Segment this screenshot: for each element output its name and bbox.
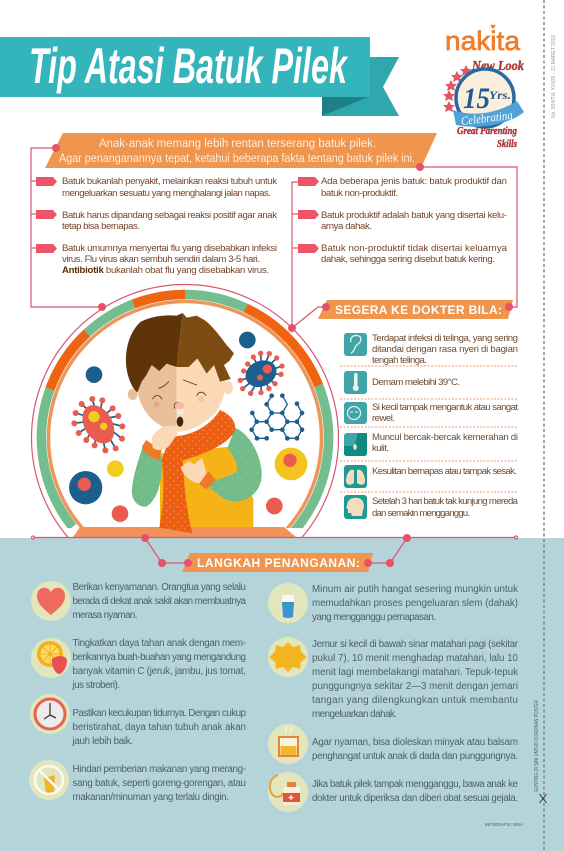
right sleeve [208,428,262,502]
step 2 text [72,638,246,691]
hands [152,426,178,450]
facts list: right column: batuk non-produktif. [321,188,398,199]
lower connector lines [32,536,518,563]
facts list: right column [298,176,508,265]
icon: red virus [71,396,125,453]
issue number vertical text: No. 834/TH. XVI/25 - 31 MARET 2015 [551,35,557,118]
boy [126,313,262,533]
step 3 text: beristirahat, daya tahan tubuh anak akan [72,722,246,733]
scarf [159,410,235,533]
step 4 text [72,764,246,803]
facts list: right column: Ada beberapa jenis batuk: batuk produktif dan [321,176,507,187]
connector lines [31,148,517,328]
icon: lungs [344,465,367,488]
credit: INFOGRAFIS: NINA [485,822,524,828]
step 1 text: merasa nyaman. [72,610,138,621]
step 1 text [72,582,247,621]
step 4 text: makanan/minuman yang terlalu dingin. [72,792,229,803]
symptom texts: kulit. [372,443,389,454]
15 years badge [443,59,524,150]
icon: plain dots [69,332,307,522]
icon: balm jar [268,724,308,764]
facial features [153,380,206,408]
step 7 text: Agar nyaman, bisa dioleskan minyak atau balsam [312,737,518,748]
left sleeve [132,445,162,507]
step 7 text [312,737,518,762]
symptom texts: rewel. [372,413,395,424]
illustration: germs and coughing boy [69,313,307,533]
15 years badge: Yrs. [489,88,511,102]
step 6 text: punggungnya sekitar 2—3 menit dengan jemari [312,681,518,692]
15 years badge: 15 [463,82,490,115]
bottom teal background [0,538,564,851]
15 years badge: Skills [497,139,517,150]
facts list: right column: dahak, sehingga sering disebut batuk kering. [321,254,495,265]
steps: left column [29,581,247,803]
step 6 text: mengeluarkan dahak. [312,709,397,720]
face [137,352,177,432]
step 5 text: Minum air putih hangat sesering mungkin untuk [312,584,518,595]
symptom texts: Si kecil tampak mengantuk atau sangat [372,402,518,413]
facts list: left column: mengeluarkan sesuatu yang menghalangi jalan napas. [62,188,271,199]
facts list: left column: Batuk umumnya menyertai flu yang disebabkan infeksi [62,243,277,254]
step 8 text: dokter untuk diperiksa dan diberi obat sesuai gejala. [312,793,518,804]
step 6 text: tangan yang dilengkungkan untuk membantu [312,695,518,706]
step 6 text: pukul 7), 10 menit menghadap matahari, lalu 10 [312,653,519,664]
symptom texts: ditandai dengan rasa nyeri di bagian [372,344,518,355]
icon: ear [344,333,367,356]
icon: medicine and stethoscope [268,772,308,812]
heading: langkah penanganan [182,553,373,572]
step 8 text [312,779,519,804]
facts list: left column [36,176,277,276]
symptom texts: Terdapat infeksi di telinga, yang sering [372,333,518,344]
step 2 text: berikannya buah-buahan yang mengandung [72,652,246,663]
step 3 text: Pastikan kecukupan tidurnya. Dengan cukup [72,708,247,719]
symptom texts: Kesulitan bernapas atau tampak sesak. [372,466,517,477]
icon: sun [268,637,308,677]
icon: clock [30,694,70,734]
icon: heart [31,581,71,621]
shirt [160,447,253,527]
step 3 text: jauh lebih baik. [72,736,133,747]
symptom texts: tengah telinga. [372,355,427,366]
heading: langkah penanganan: LANGKAH PENANGANAN: [197,556,360,570]
intro banner: Agar penanganannya tepat, ketahui beberapa fakta tentang batuk pilek ini. [59,151,415,165]
step 5 text [312,584,518,623]
icon: thermometer [344,371,367,394]
step 5 text: memudahkan proses pengeluaran slem (dahak) [312,598,518,609]
step 7 text: penghangat untuk anak di dada dan punggungnya. [312,751,518,762]
facts list: right column: arnya dahak. [321,221,372,232]
title: Tip Atasi Batuk Pilek [29,38,348,94]
icon: blue virus [238,351,285,396]
icon: citrus and strawberry [31,638,71,678]
step 5 text: yang mengganggu pernapasan. [312,612,436,623]
heading: segera ke dokter: SEGERA KE DOKTER BILA: [335,303,502,317]
symptom texts: Demam melebihi 39°C. [372,377,460,388]
step 6 text: Jemur si kecil di bawah sinar matahari pagi (sekitar [312,639,519,650]
steps: right column [268,583,519,812]
symptom texts: dan semakin mengganggu. [372,508,470,519]
facts list: right column: Batuk produktif adalah batuk yang disertai kelu- [321,210,507,221]
title ribbon [0,37,399,116]
symptom texts [372,333,519,519]
icon: skin rash [344,433,367,456]
symptom separators [340,366,518,492]
heading: segera ke dokter [318,300,513,319]
circular illustration frame [30,284,340,537]
intro banner: Anak-anak memang lebih rentan terserang batuk pilek. [99,136,376,150]
15 years badge: Celebrating [460,108,513,128]
symptom texts: Muncul bercak-bercak kemerahan di [372,432,518,443]
15 years badge: New Look [471,59,524,74]
facts list: left column: virus. Flu virus akan sembuh sendiri dalam 3-5 hari. [62,254,260,265]
15 years badge: Great Parenting [457,126,517,137]
step 8 text: Jika batuk pilek tampak mengganggu, bawa anak ke [312,779,519,790]
cut here note: GUNTING DI SINI UNTUK DIJADIKAN POSTER [534,700,540,792]
hair [126,313,183,392]
icon: molecule [250,394,304,440]
panel: see a doctor [318,300,519,519]
step 2 text: Tingkatkan daya tahan anak dengan mem- [72,638,246,649]
step 1 text: berada di dekat anak sakit akan membuatnya [72,596,247,607]
symptom texts: Setelah 3 hari batuk tak kunjung mereda [372,496,519,507]
step 6 text [312,639,519,720]
step 1 text: Berikan kenyamanan. Orangtua yang selalu [72,582,246,593]
step 2 text: banyak vitamin C (jeruk, jambu, jus tomat, [72,666,246,677]
facts list: left column: tetap bisa bernapas. [62,221,140,232]
ears [128,389,138,400]
step 3 text [72,708,247,747]
facts list: right column: Batuk non-produktif tidak disertai keluarnya [321,243,508,254]
icon: sleepy face [344,402,367,424]
facts list: left column: Batuk bukanlah penyakit, melainkan reaksi tubuh untuk [62,176,277,187]
icon: head [344,495,367,519]
intro banner [45,133,437,168]
icon: glass of water [268,583,308,623]
step 4 text: Hindari pemberian makanan yang merang- [72,764,246,775]
step 4 text: sang batuk, seperti goreng-gorengan, atau [72,778,246,789]
icon: no cold drink [29,760,69,800]
facts list: left column: Batuk harus dipandang sebagai reaksi positif agar anak [62,210,277,221]
icon: scissors [540,794,546,803]
nakita logo: nakita [445,26,521,56]
facts list: left column: Antibiotik bukanlah obat flu yang disebabkan virus. [62,265,269,276]
step 6 text: menit lagi membelakangi matahari. Tepuk-tepuk [312,667,518,678]
step 2 text: jus stroberi). [72,680,120,691]
